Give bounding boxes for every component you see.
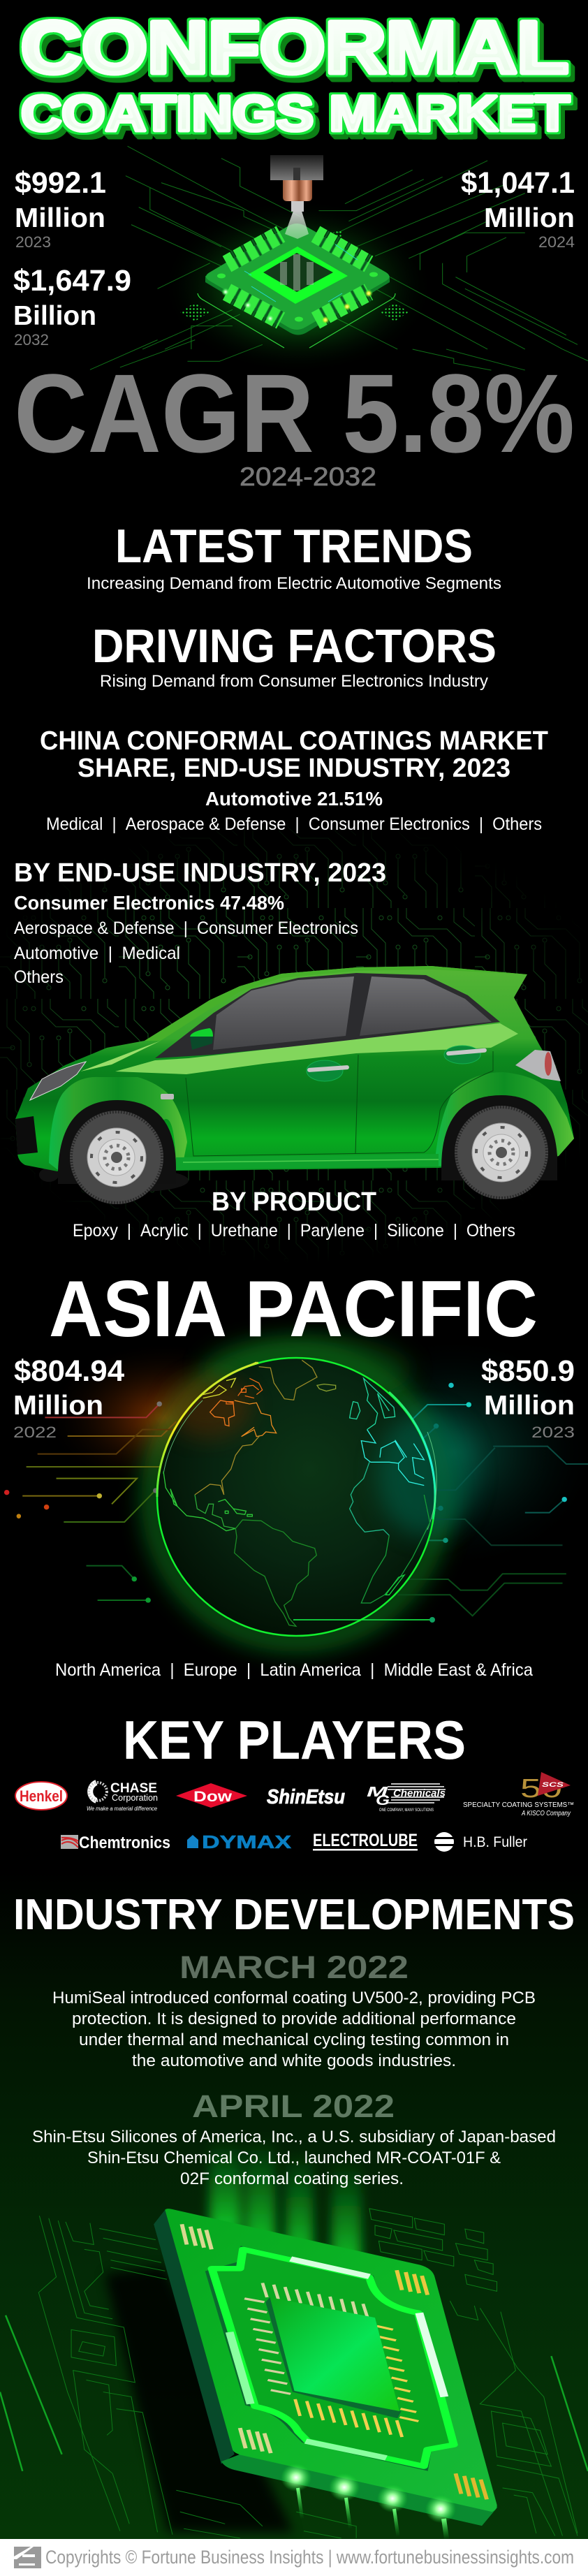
logo: Dymax [187, 1831, 292, 1852]
chip base [205, 276, 390, 335]
labrador [235, 1400, 277, 1437]
logo: MG Chemicals: G [376, 1793, 390, 1808]
connector dots [4, 1383, 567, 1603]
west coast [163, 1472, 235, 1531]
market value 2023: $992.1 [15, 166, 106, 200]
glowing edge lines [0, 2315, 588, 2471]
africa [350, 1462, 389, 1535]
logo: Henkel [15, 1782, 67, 1810]
orange tint inside globe [168, 1376, 251, 1439]
rear wheel [455, 1106, 548, 1199]
car body [15, 966, 574, 1171]
logo: Chase: We make a material difference [87, 1806, 158, 1812]
nozzle [270, 155, 323, 212]
belt highlight [115, 1023, 518, 1074]
logo: Specialty Coating Systems [463, 1772, 574, 1817]
side shadow [105, 2267, 293, 2532]
asia pacific value 2022: Million [13, 1391, 103, 1421]
title line 1: CONFORMAL [21, 7, 568, 89]
logo: Dow [176, 1783, 247, 1808]
development: March 2022: protection. It is designed to provide additional performance [72, 2010, 516, 2028]
asia pacific value 2023: Million [484, 1391, 575, 1421]
chip pads [227, 234, 369, 321]
circuit traces [90, 146, 588, 370]
development: April 2022: Shin-Etsu Chemical Co. Ltd., launched MR-COAT-01F & [87, 2149, 501, 2167]
development: April 2022 [32, 2088, 556, 2188]
bright outline traces [198, 293, 395, 348]
logo: Dymax: DYMAX [202, 1831, 292, 1852]
development: April 2022: Shin-Etsu Silicones of America, Inc., a U.S. subsidiary of Japan-based [32, 2128, 556, 2146]
chip centre frame [248, 247, 348, 304]
development: April 2022: 02F conformal coating series. [180, 2169, 404, 2188]
title [21, 7, 570, 142]
caribbean [218, 1500, 252, 1516]
driving factors: DRIVING FACTORS [92, 620, 497, 673]
mediterranean and europe [361, 1430, 424, 1486]
continents [163, 1360, 430, 1626]
upper light beams [210, 2137, 361, 2270]
development: March 2022: the automotive and white goods industries. [132, 2051, 456, 2070]
logo: H.B. Fuller [433, 1832, 527, 1852]
China market share: Automotive 21.51% [205, 788, 383, 810]
south africa [361, 1495, 430, 1603]
arctic islands [198, 1362, 256, 1398]
by end-use industry [14, 858, 386, 987]
bottom LEDs [281, 2464, 456, 2540]
logo: Specialty Coating Systems: 50 [520, 1774, 562, 1803]
connector lines [22, 1404, 588, 1616]
China market share: SHARE, END-USE INDUSTRY, 2023 [78, 754, 510, 783]
hudson bay [210, 1400, 235, 1426]
by end-use industry: Aerospace & Defense | Consumer Electronics [14, 919, 358, 938]
market value 2032: Billion [13, 301, 96, 331]
logo: Chase: Corporation [112, 1792, 158, 1803]
top green glow [203, 1334, 412, 1404]
rear window [360, 976, 492, 1036]
hood highlight [80, 1041, 161, 1071]
sphere [157, 1358, 435, 1636]
madagascar [385, 1575, 404, 1595]
logo: H.B. Fuller: H.B. Fuller [463, 1834, 527, 1850]
core side [265, 2297, 402, 2418]
logo: Specialty Coating Systems: SPECIALTY COATING SYSTEMS™ [463, 1801, 574, 1809]
China market share [40, 726, 548, 834]
headlight [30, 1062, 86, 1100]
sill [176, 1154, 439, 1170]
orange glow [45, 1341, 283, 1495]
China market share: CHINA CONFORMAL COATINGS MARKET [40, 726, 548, 756]
chip face [165, 2209, 497, 2512]
market value 2032 [13, 264, 131, 349]
development: March 2022: HumiSeal introduced conformal coating UV500-2, providing PCB [52, 1989, 536, 2007]
chip holes [217, 272, 378, 321]
logo: Dow: Dow [193, 1789, 233, 1805]
development: April 2022: APRIL 2022 [192, 2088, 395, 2124]
market value 2023: Million [15, 203, 105, 233]
circuit board illustration with chip and spray nozzle [90, 146, 588, 374]
globe illustration [4, 1334, 588, 1640]
asia pacific value 2022: $804.94 [14, 1354, 124, 1388]
development: March 2022: under thermal and mechanical cycling testing common in [79, 2030, 509, 2049]
east coast and gulf [195, 1435, 260, 1495]
market value 2032: $1,647.9 [13, 264, 131, 298]
inner frame [212, 2249, 454, 2466]
canadian islands [226, 1378, 263, 1404]
core [270, 2297, 399, 2411]
by end-use industry: Automotive | Medical [14, 944, 180, 963]
development: March 2022 [52, 1949, 536, 2070]
market value 2032: 2032 [14, 331, 49, 349]
icon: green car [15, 966, 574, 1204]
logo: MG Chemicals [367, 1784, 446, 1813]
icon: Fortune Business Insights logo [14, 2547, 41, 2568]
latest trends: LATEST TRENDS [115, 520, 473, 573]
frame highlights [230, 2259, 444, 2458]
dot clusters [180, 229, 409, 321]
logo: Henkel: Henkel [20, 1787, 63, 1805]
circuit traces [38, 2209, 578, 2538]
regions: North America | Europe | Latin America | Middle East & Africa [55, 1660, 533, 1680]
asia pacific value 2022 [13, 1354, 124, 1441]
front wheel [70, 1111, 163, 1204]
logo: Shin-Etsu: ShinEtsu [267, 1786, 345, 1808]
logo: MG Chemicals: Chemicals [393, 1787, 446, 1799]
logo: MG Chemicals: M [367, 1785, 389, 1800]
spray cone [285, 211, 309, 239]
ring inner arcs [163, 1400, 436, 1530]
roof and pillar [145, 966, 527, 1041]
footer [0, 2539, 588, 2576]
cyan traces [244, 244, 358, 302]
circuit texture behind car [0, 817, 588, 1264]
logo: Chemtronics: Chemtronics [79, 1834, 170, 1852]
lower connector dot [429, 1617, 435, 1623]
by end-use industry: BY END-USE INDUSTRY, 2023 [14, 858, 386, 888]
front window [213, 976, 354, 1050]
industry developments heading: INDUSTRY DEVELOPMENTS [13, 1891, 575, 1939]
asia pacific value 2022: 2022 [13, 1424, 57, 1441]
ground shadow [39, 1168, 189, 1192]
logo: MG Chemicals: ONE COMPANY, MANY SOLUTIONS [379, 1808, 434, 1813]
by product: BY PRODUCT [212, 1187, 376, 1217]
industry developments background [0, 1872, 588, 2539]
logo: Electrolube: ELECTROLUBE [313, 1831, 418, 1850]
latest trends: Increasing Demand from Electric Automotive Segments [87, 574, 501, 593]
market value 2024: Million [484, 203, 575, 233]
logo: Chase [87, 1781, 158, 1812]
by product: Epoxy | Acrylic | Urethane | Parylene | Silicone | Others [73, 1221, 515, 1241]
fenders [49, 1072, 574, 1170]
northern europe [350, 1378, 395, 1430]
latest trends [87, 520, 501, 593]
green halo [153, 1354, 439, 1640]
window frame [155, 973, 500, 1058]
by product [73, 1187, 515, 1241]
mirror [190, 1028, 213, 1050]
chip illustration [0, 2137, 588, 2540]
key players heading: KEY PLAYERS [123, 1709, 466, 1771]
teal tint inside globe [377, 1411, 475, 1537]
development: March 2022: MARCH 2022 [179, 1949, 409, 1985]
market value 2023: 2023 [15, 233, 51, 251]
CAGR: 2024-2032 [240, 462, 376, 491]
lower connector line [293, 1619, 432, 1620]
iceland [317, 1384, 336, 1391]
door handles [161, 1046, 487, 1099]
logo: Specialty Coating Systems: A KISCO Company [521, 1810, 571, 1817]
central america [195, 1495, 235, 1528]
by end-use industry: Consumer Electronics 47.48% [14, 892, 284, 914]
driving factors: Rising Demand from Consumer Electronics Industry [100, 672, 488, 691]
China market share: Medical | Aerospace & Defense | Consumer Electronics | Others [46, 814, 542, 834]
corner pins [182, 2224, 487, 2499]
ring left arc [157, 1363, 258, 1497]
asia pacific value 2023: 2023 [531, 1424, 575, 1441]
teal glow [307, 1334, 588, 1572]
front bumper [15, 1116, 38, 1155]
chip sides [154, 2210, 498, 2526]
chip pins [244, 2283, 418, 2437]
market value 2024: 2024 [538, 233, 575, 251]
asia pacific value 2023: $850.9 [481, 1354, 575, 1388]
chip glow [162, 199, 434, 374]
logo: Chase: CHASE [110, 1781, 157, 1796]
asia pacific heading: ASIA PACIFIC [49, 1265, 538, 1354]
key player logos [15, 1772, 574, 1852]
tail light [515, 1050, 561, 1081]
market value 2023 [15, 166, 106, 251]
by end-use industry: Others [14, 967, 64, 987]
greenland [259, 1360, 317, 1400]
market value 2024: $1,047.1 [461, 166, 575, 200]
inner frame shadow [208, 2248, 452, 2468]
market value 2024 [461, 166, 575, 251]
title line 2: COATINGS MARKET [21, 87, 570, 142]
ring right arc [389, 1392, 435, 1519]
wheel arches [58, 1095, 557, 1184]
globe ring [157, 1358, 435, 1636]
logo: Specialty Coating Systems: SCS [542, 1781, 564, 1788]
south america [235, 1520, 316, 1626]
door lines [186, 1051, 493, 1156]
asia pacific value 2023 [481, 1354, 575, 1441]
led lights [221, 288, 373, 324]
